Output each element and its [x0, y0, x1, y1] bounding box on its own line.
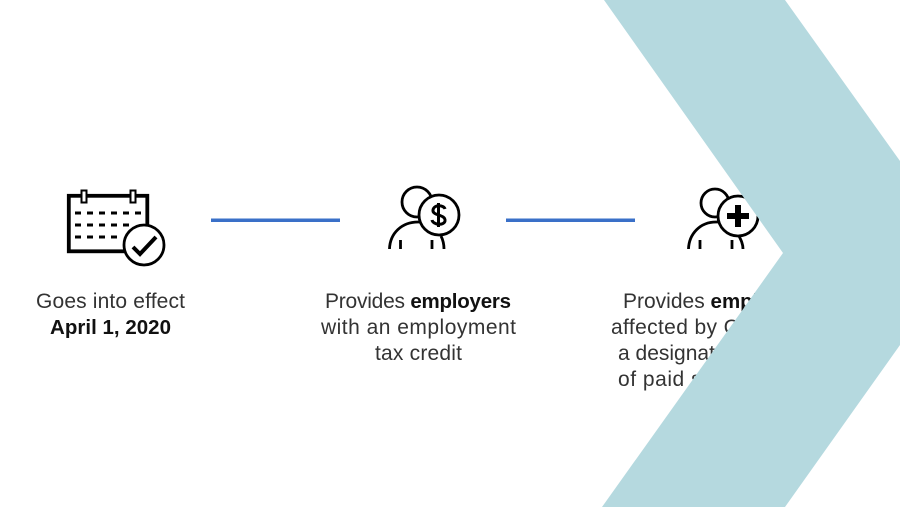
icon: person with dollar coin	[390, 187, 459, 249]
text: employees sick leave: Provides employees	[623, 290, 817, 313]
text: goes into effect	[36, 290, 185, 339]
text: employees sick leave: a designated amount	[618, 342, 814, 365]
chevron arrow	[602, 0, 900, 507]
text: employees sick leave: affected by COVID-19	[611, 316, 823, 339]
text: employers credit	[320, 290, 516, 365]
text: employees sick leave: of paid sick leave	[618, 368, 788, 391]
icon: person with plus coin	[688, 189, 758, 249]
text: goes into effect: Goes into effect	[36, 290, 185, 313]
text: employees sick leave	[611, 290, 823, 391]
connector line 1	[211, 218, 340, 222]
text: goes into effect: April 1, 2020	[50, 316, 171, 339]
text: employers credit: with an employment	[320, 316, 516, 339]
icon: calendar with check mark	[69, 190, 164, 265]
text: employers credit: tax credit	[375, 342, 462, 365]
connector line 2	[506, 218, 635, 222]
text: employers credit: Provides employers	[325, 290, 511, 313]
